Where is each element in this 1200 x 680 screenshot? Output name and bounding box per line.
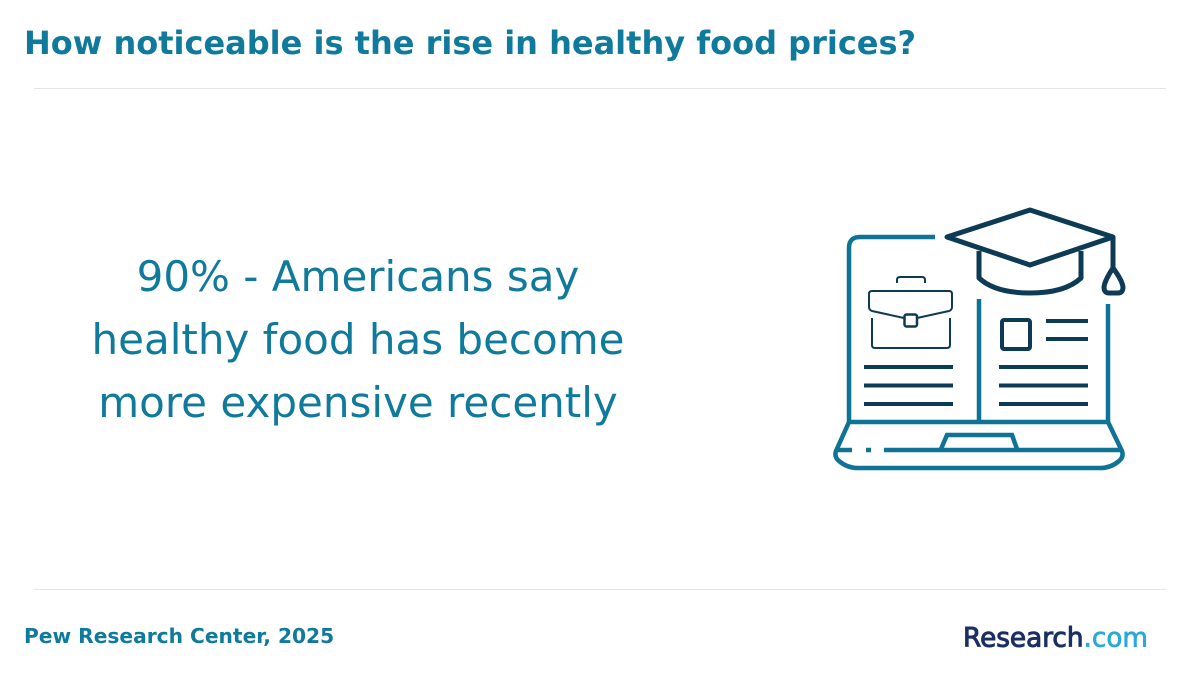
briefcase (869, 277, 952, 348)
main statement: more expensive recently (98, 378, 618, 427)
main statement: 90% - Americans say (137, 252, 579, 301)
laptop body (835, 237, 1123, 468)
main statement (92, 252, 624, 427)
title: How noticeable is the rise in healthy food prices? (24, 24, 916, 62)
main statement: healthy food has become (92, 315, 624, 364)
logo: Research.com: Research.com (963, 622, 1148, 654)
text lines and photo box (864, 320, 1088, 404)
source: Pew Research Center, 2025 (24, 624, 334, 648)
graduation cap (947, 210, 1123, 293)
